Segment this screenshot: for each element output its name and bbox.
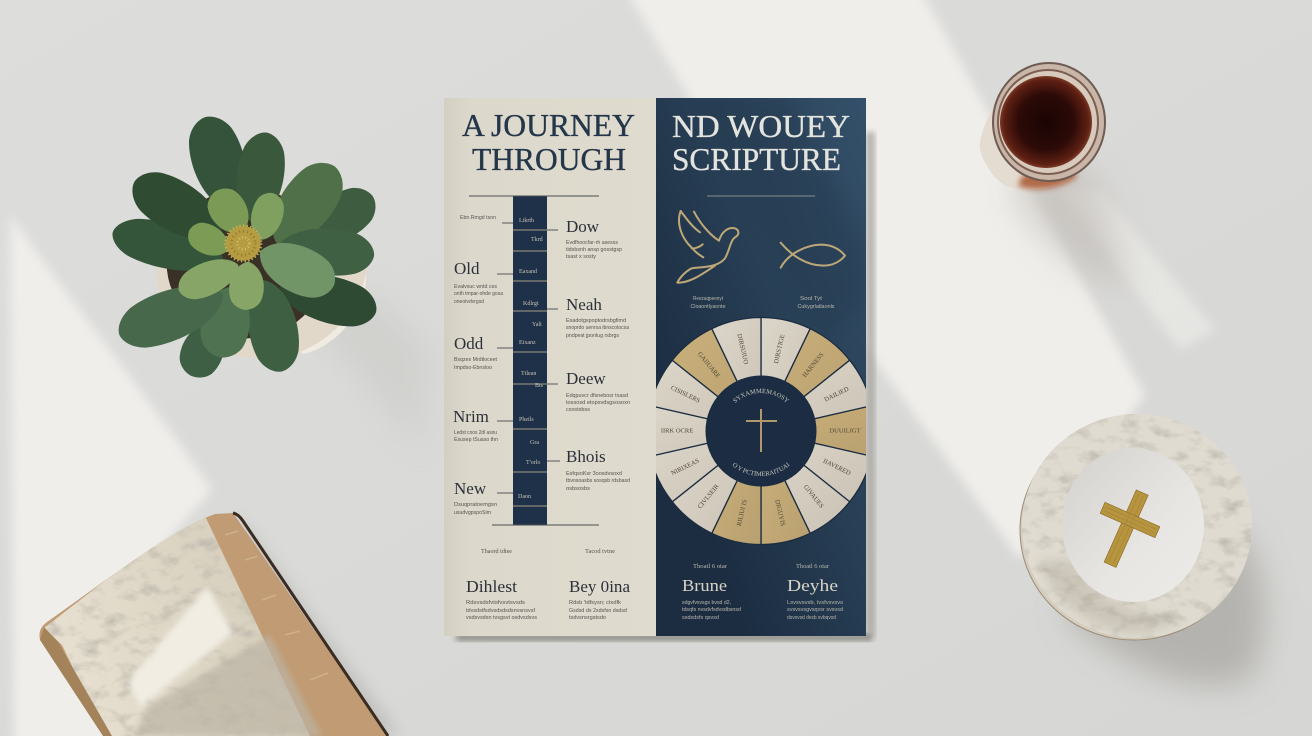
timeline column: Bts — [535, 383, 544, 389]
fish caption — [798, 296, 835, 310]
dove caption — [690, 296, 726, 310]
entry: New: usudvgpspoSim — [454, 510, 491, 516]
bowl worn patches — [1040, 560, 1190, 634]
block: Dihlest: Rdsvsdsfvtsfvsvtsvsds — [466, 600, 525, 606]
wheel segment labels: DIRSTIGE — [773, 334, 786, 364]
entry: Bhois: Bhois — [566, 447, 606, 466]
entry: Deew: Deew — [566, 369, 606, 388]
block: Bey 0ina — [569, 577, 630, 621]
entry: Bhois: osbsosbs — [566, 486, 590, 492]
entry: Old: Evalvsuc wntd ces — [454, 284, 497, 290]
block: Deyhe: Lsvsvsvsb, tvsfvsvsvs — [787, 600, 843, 606]
block: Dihlest — [466, 577, 537, 621]
wheel segment labels: HARNESS — [801, 351, 826, 379]
entry: New — [454, 479, 497, 516]
entry: Odd: Bsqzes Mrdtloceet — [454, 357, 497, 363]
block: Bey 0ina: Gsdsd ds 2sdsfsn dsdsd — [569, 608, 627, 614]
wheel segment labels: DIRSUIUO — [735, 333, 749, 365]
entry: Odd — [454, 334, 497, 371]
wheel segment labels: IIAVERED — [822, 458, 852, 477]
entry: Neah: Esadotgspoptodrsbgfimd — [566, 318, 626, 324]
gold cross — [1083, 480, 1170, 577]
plant pot — [157, 188, 367, 358]
glass body — [980, 90, 1080, 189]
entry: Deew: Edqpuvcr dfsnebosr txasd — [566, 393, 628, 399]
wheel segment labels: DAILIED — [823, 386, 850, 404]
block: Bey 0ina: Bey 0ina — [569, 577, 630, 596]
block: Bey 0ina: Rdsb 'tdfsysn; ctxdfk — [569, 600, 621, 606]
entry: Nrim — [453, 407, 498, 443]
book — [39, 513, 388, 736]
entry: Neah: Neah — [566, 295, 602, 314]
entry: Old — [454, 259, 504, 305]
right title: ND WOUEY — [672, 108, 850, 144]
entry: Bhois: EsfqsoKsr 3oosdvsoxd — [566, 471, 622, 477]
entry: Bhois: tbvosoasbs sosqsb rdsbasd — [566, 478, 630, 484]
block: Brune — [682, 576, 741, 621]
wheel segment labels: RILIUI IS — [736, 499, 749, 527]
left panel — [444, 98, 656, 636]
wheel segment labels: NIRIXEAS — [670, 457, 701, 477]
entry: New: New — [454, 479, 487, 498]
right panel — [656, 98, 866, 636]
block: Brune: Brune — [682, 576, 727, 595]
timeline column: Ttlean — [521, 371, 536, 377]
stone bowl with cross — [1020, 414, 1252, 640]
entry: Old: oneotvdvrgsd — [454, 299, 484, 305]
wheel segment labels: DIGUYIS — [773, 499, 786, 527]
hub bottom text: O Y PCTIMERAITUAI — [732, 462, 790, 476]
hub cross — [746, 409, 777, 452]
book bark grain — [225, 531, 328, 680]
entry: Odd: Odd — [454, 334, 484, 353]
block: Dihlest: Dihlest — [466, 577, 517, 596]
wheel chart — [656, 316, 866, 545]
entry: Dow: tidsbsnh ansp gosstgsp — [566, 247, 622, 253]
wheel segment labels: DUUILIGT — [829, 427, 861, 434]
hub top text: SYXAMMEMAOSY — [733, 388, 790, 403]
shadows on table — [225, 132, 1265, 736]
divider — [707, 195, 815, 197]
fish caption: Cukygrlatlaonls — [798, 304, 835, 310]
left title — [462, 107, 635, 177]
entry: New: Dsuqpratoemgsn — [454, 502, 497, 508]
panel diagonal shade — [700, 98, 866, 340]
entry: Dow: Evdfhoocfar-rh asesss — [566, 240, 618, 246]
block: Brune: ssdsdsfs qsvsd — [682, 615, 719, 621]
timeline column — [469, 196, 599, 525]
timeline leader lines — [497, 223, 560, 493]
wheel segments — [647, 317, 875, 544]
section label left: Thoatl 6 otar — [693, 564, 727, 570]
wine reflection — [1018, 162, 1078, 189]
entry: Nrim: Esusep tSuaso thn — [454, 437, 498, 443]
timeline column: Daon — [518, 494, 531, 500]
timeline column: Ltkrth — [519, 218, 534, 224]
icon: dove — [677, 211, 738, 283]
timeline column: Gra — [530, 440, 539, 446]
left title: A JOURNEY — [462, 107, 635, 143]
wheel segment labels — [661, 333, 861, 527]
block: Deyhe: svsvsvsgvsqvsr svsvsd — [787, 607, 843, 613]
book page block — [44, 516, 310, 736]
entry: Nrim: Nrim — [453, 407, 489, 426]
timeline column: Kdlrgt — [523, 301, 539, 307]
entry: Deew: tossosd etopsvdsgsosoxn — [566, 400, 630, 406]
entry: Nrim: Ledst coos 2dl asou — [454, 430, 497, 436]
fish caption: Sool Tyt — [800, 296, 823, 302]
block: Dihlest: tdvsdstfsdvsdsdsdsnvsnsvsf — [466, 608, 535, 614]
block: Deyhe: dsvsvsd dvsb svbqvsd — [787, 615, 836, 621]
wheel hub — [706, 376, 816, 486]
block: Brune: sdgvfvsvsgs bvsd d2, — [682, 600, 731, 606]
wheel segment labels: CIVLSEIR — [697, 483, 721, 510]
entry: Dow — [566, 217, 622, 260]
entry: Neah — [566, 295, 630, 339]
book worn highlight — [128, 587, 233, 707]
wine — [1000, 76, 1092, 168]
wheel segment labels: CISISLERS — [669, 384, 701, 405]
wheel segment labels: GIVAUES — [802, 484, 825, 510]
entry: Deew — [566, 369, 630, 413]
flower center — [225, 225, 261, 261]
icon: fish — [781, 243, 845, 268]
book left edge — [40, 627, 112, 736]
entry: Neah: snoprdo uenrsa ibnscotocsa — [566, 325, 630, 331]
wheel segment labels: GAIIUARE — [696, 351, 721, 380]
block: Deyhe: Deyhe — [787, 576, 838, 595]
entry: Old: onth tmpar-ohde gosa — [454, 291, 504, 297]
book worn shading — [135, 635, 322, 736]
block: Brune: tdsqfs nvsdvfsdvsdbsnsd — [682, 607, 741, 613]
poster — [444, 98, 866, 636]
timeline column: Yalt — [532, 322, 542, 328]
book spine edge — [233, 513, 388, 736]
right title: SCRIPTURE — [672, 141, 841, 177]
block: Bey 0ina: tsdvsnsrgstsdo — [569, 615, 606, 621]
entry: Old: Old — [454, 259, 480, 278]
glass rim — [993, 63, 1105, 181]
block: Dihlest: vsdsvsdsn tvsgsvt osdvsdsvs — [466, 615, 537, 621]
section label left: Thaord tdtee — [481, 549, 512, 555]
plant — [107, 110, 385, 384]
entry: Deew: csxstsbss — [566, 407, 590, 413]
bowl hollow — [1062, 448, 1204, 602]
bowl base — [1020, 420, 1248, 640]
entry: Odd: Impdso-Ebnsloo — [454, 365, 492, 371]
bowl rim — [1022, 414, 1252, 638]
dove caption: Reezaqpeenyt — [693, 296, 723, 302]
timeline column: Pheils — [519, 417, 534, 423]
entry: Neah: pndpest jponlug rsbrgs — [566, 333, 619, 339]
timeline column: Eixanz — [519, 340, 536, 346]
entry: Dow: Dow — [566, 217, 600, 236]
left title: THROUGH — [472, 141, 626, 177]
right title — [672, 108, 850, 177]
wheel segment labels: IIRK OCRE — [661, 427, 693, 434]
section label right: Thoatl 6 otar — [796, 564, 829, 570]
wine glass — [980, 63, 1105, 189]
timeline column: Eaxand — [519, 269, 537, 275]
timeline column: T'orlo — [526, 460, 540, 466]
dove caption: Cloaontlyaonte — [690, 304, 726, 310]
block: Deyhe — [787, 576, 843, 621]
entry: Bhois — [566, 447, 630, 492]
note: top: Ebn.Rmgd tson — [460, 215, 496, 221]
front leaves — [173, 181, 344, 311]
entry: Dow: tsast x sosty — [566, 254, 596, 260]
section label right: Tacod tvtne — [585, 549, 615, 555]
timeline column: Tkrd — [531, 237, 543, 243]
back leaves — [107, 110, 385, 384]
